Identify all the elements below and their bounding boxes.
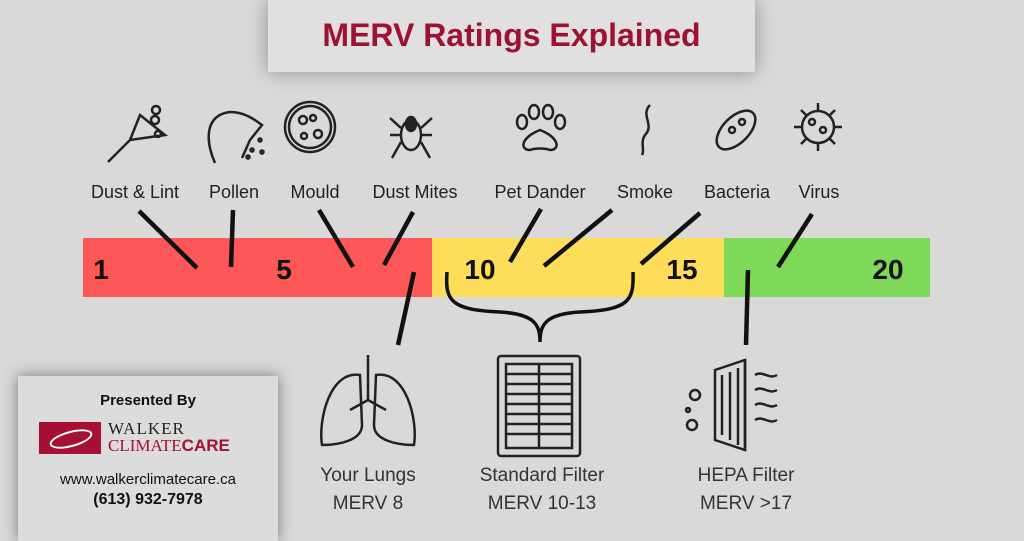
title: MERV Ratings Explained xyxy=(322,17,701,53)
logo: CLIMATECARE xyxy=(108,436,230,455)
text: MERV 10-13 xyxy=(488,493,596,514)
icon: duster xyxy=(108,106,165,162)
icon: mite xyxy=(390,117,432,158)
text: Your Lungs xyxy=(320,465,416,486)
text: Dust Mites xyxy=(372,182,458,202)
text: 15 xyxy=(666,254,698,285)
website: www.walkerclimatecare.ca xyxy=(60,471,236,488)
icon: paw xyxy=(517,105,565,150)
text: Bacteria xyxy=(704,182,770,202)
text: 1 xyxy=(93,254,109,285)
title xyxy=(268,0,755,72)
text: 5 xyxy=(276,254,292,285)
labels xyxy=(91,182,839,202)
icon: standard filter xyxy=(498,356,580,456)
icon: lungs xyxy=(321,355,415,445)
logo xyxy=(39,419,230,455)
icon: mould xyxy=(285,102,335,152)
icon: virus xyxy=(794,103,842,151)
text: HEPA Filter xyxy=(698,465,794,486)
icon: smoke xyxy=(642,105,650,155)
text: MERV >17 xyxy=(700,493,792,514)
scale bar xyxy=(83,238,930,297)
text: Mould xyxy=(290,182,340,202)
bottom captions xyxy=(320,465,794,514)
icon: pollen xyxy=(209,112,264,163)
text: 10 xyxy=(464,254,496,285)
phone: (613) 932-7978 xyxy=(93,491,203,508)
text: Virus xyxy=(799,182,839,202)
presented by: Presented By xyxy=(100,392,196,409)
text: MERV 8 xyxy=(333,493,403,514)
scale numbers xyxy=(93,254,904,285)
text: 20 xyxy=(872,254,904,285)
text: Standard Filter xyxy=(480,465,604,486)
logo: WALKER xyxy=(108,419,185,438)
text: Dust & Lint xyxy=(91,182,179,202)
icon: bacteria xyxy=(710,104,762,156)
text: Pet Dander xyxy=(494,182,586,202)
text: Pollen xyxy=(209,182,259,202)
text: Smoke xyxy=(617,182,673,202)
icon: hepa filter xyxy=(686,360,777,450)
presenter panel xyxy=(18,376,278,541)
brace xyxy=(447,272,633,342)
